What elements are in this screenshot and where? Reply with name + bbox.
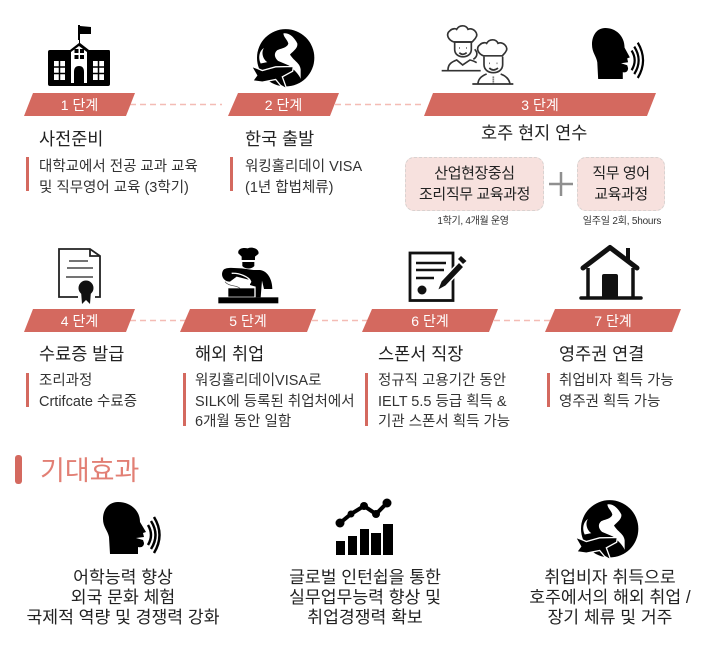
- description: 영주권 획득 가능: [559, 394, 660, 410]
- text: 실무업무능력 향상 및: [289, 587, 441, 607]
- text: 호주에서의 해외 취업 /: [529, 587, 691, 607]
- description: 정규직 고용기간 동안: [378, 373, 506, 389]
- box: 산업현장중심 조리직무 교육과정: 산업현장중심: [434, 165, 515, 182]
- description: 취업비자 획득 가능: [559, 373, 674, 389]
- banner: 1 단계: 1 단계: [61, 97, 98, 113]
- box: 직무 영어 교육과정: 직무 영어: [592, 165, 650, 182]
- text: 취업경쟁력 확보: [307, 607, 423, 627]
- text: 장기 체류 및 거주: [547, 607, 672, 627]
- description: SILK에 등록된 취업처에서: [195, 394, 355, 410]
- text: [26, 567, 220, 627]
- description: 워킹홀리데이VISA로: [195, 373, 321, 389]
- description: 워킹홀리데이 VISA: [245, 159, 362, 175]
- icon: chefs: [442, 25, 514, 85]
- text: [529, 567, 691, 627]
- banner: 7 단계: 7 단계: [594, 313, 632, 329]
- accent bar: [183, 373, 186, 426]
- step 4: [24, 248, 137, 410]
- description: [39, 372, 137, 410]
- description: 6개월 동안 일함: [195, 414, 291, 430]
- banner: 3 단계: 3 단계: [521, 97, 559, 113]
- section heading: 기대효과: [15, 455, 139, 486]
- description: 기관 스폰서 획득 가능: [378, 414, 510, 430]
- box: 직무 영어 교육과정: [577, 157, 665, 211]
- caption: 수업 시간: 일주일 2회, 5hours: [583, 216, 661, 227]
- description: [378, 372, 510, 430]
- banner: 5 단계: [180, 309, 316, 332]
- step 2: [228, 29, 362, 196]
- icon: speaking head: [592, 28, 644, 79]
- icon: plus: [549, 172, 573, 196]
- box: 산업현장중심 조리직무 교육과정: [405, 157, 544, 211]
- icon: globe with plane: [576, 500, 638, 558]
- step 1: [24, 25, 198, 196]
- banner: 6 단계: [362, 309, 498, 332]
- heading: 수료증 발급: 수료증 발급: [39, 344, 124, 364]
- accent bar: [230, 157, 233, 191]
- heading: 해외 취업: 해외 취업: [195, 344, 264, 364]
- accent bar: [365, 373, 368, 426]
- text: [289, 567, 441, 627]
- icon: certificate: [58, 248, 101, 304]
- heading: 호주 현지 연수: 호주 현지 연수: [481, 123, 587, 143]
- accent pill: [15, 455, 22, 484]
- banner: 5 단계: 5 단계: [229, 313, 267, 329]
- banner: 7 단계: [545, 309, 681, 332]
- step 7: [545, 244, 681, 410]
- step 6: [362, 252, 510, 430]
- heading: 영주권 연결: 영주권 연결: [559, 344, 644, 364]
- heading: 사전준비: 사전준비: [39, 129, 103, 149]
- icon: globe with plane: [252, 29, 314, 88]
- accent bar: [26, 373, 29, 407]
- banner: 3 단계: [424, 93, 656, 116]
- icon: speaking head: [103, 502, 161, 554]
- description: [39, 158, 198, 196]
- icon: growth chart: [336, 498, 393, 555]
- description: 및 직무영어 교육 (3학기): [39, 180, 189, 196]
- banner: 4 단계: 4 단계: [61, 313, 98, 329]
- banner: 2 단계: [228, 93, 339, 116]
- description: Crtifcate 수료증: [39, 394, 137, 410]
- description: 조리과정: [39, 373, 92, 389]
- effect 3: [529, 500, 691, 627]
- icon: school: [48, 25, 110, 86]
- heading text: 기대효과: [40, 456, 139, 486]
- icon: house: [579, 244, 643, 300]
- description: [245, 158, 362, 196]
- banner: 4 단계: [24, 309, 135, 332]
- description: [559, 372, 674, 410]
- heading: 한국 출발: 한국 출발: [245, 129, 314, 149]
- description: [195, 372, 355, 430]
- description: 대학교에서 전공 교과 교육: [39, 159, 198, 175]
- description: IELT 5.5 등급 획득 &: [378, 394, 507, 410]
- box: 직무 영어 교육과정: 교육과정: [594, 186, 648, 203]
- text: 취업비자 취득으로: [544, 567, 676, 587]
- banner: 6 단계: 6 단계: [411, 313, 449, 329]
- banner: 2 단계: 2 단계: [265, 97, 302, 113]
- text: 외국 문화 체험: [71, 587, 175, 607]
- step 5: [180, 248, 355, 430]
- caption: 운영 기간: 1학기, 4개월 운영: [437, 216, 509, 227]
- text: 국제적 역량 및 경쟁력 강화: [26, 607, 220, 627]
- step 3: [405, 25, 665, 227]
- accent bar: [26, 157, 29, 191]
- icon: cook at pot: [218, 248, 278, 304]
- text: 글로벌 인턴쉽을 통한: [289, 567, 441, 587]
- banner: 1 단계: [24, 93, 135, 116]
- heading: 스폰서 직장: 스폰서 직장: [378, 344, 463, 364]
- accent bar: [547, 373, 550, 407]
- effect 2: [289, 498, 441, 627]
- text: 어학능력 향상: [73, 567, 173, 587]
- effect 1: [26, 502, 220, 627]
- box: 산업현장중심 조리직무 교육과정: 조리직무 교육과정: [419, 186, 530, 203]
- icon: document and pen: [408, 252, 466, 302]
- description: (1년 합법체류): [245, 180, 333, 196]
